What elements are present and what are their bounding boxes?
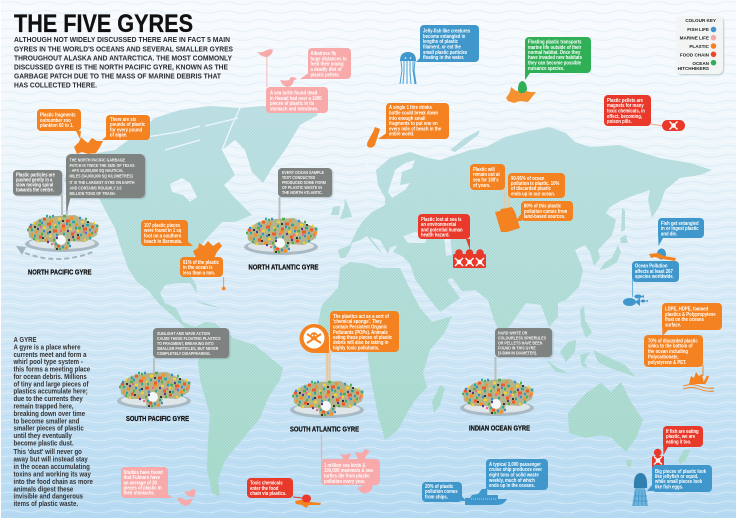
callout: fulmars: pieces of plastic in — [124, 485, 162, 492]
icon: sunken plastic — [683, 372, 714, 391]
callout: one litre bottle: into enough small — [389, 115, 425, 122]
gyre: south atlantic — [290, 350, 364, 434]
callout: sunlight and wave action: COMPLETELY DISAPPEARING. — [157, 351, 211, 356]
gyre: indian ocean: INDIAN OCEAN GYRE — [469, 426, 530, 432]
callout: albatross — [300, 48, 351, 79]
callout: one million sea birds — [321, 435, 380, 485]
gyre: south pacific — [117, 358, 191, 423]
icon: bottle — [367, 127, 380, 148]
intro text: HAS COLLECTED THERE. — [14, 80, 97, 90]
callout: human health hazard — [418, 214, 470, 250]
icon: bird below box — [357, 485, 373, 493]
text block: a gyre: of tiny and large pieces of — [14, 381, 89, 388]
gyre: south atlantic: SOUTH ATLANTIC GYRE — [290, 426, 359, 434]
colour key — [676, 16, 723, 74]
callout: human health hazard: health hazard. — [421, 232, 450, 239]
icon: poison pill — [662, 120, 685, 131]
callout: chemical sponge: The plastics act as a sort of — [333, 313, 389, 320]
callout: bermuda: foot on a southern — [144, 233, 181, 240]
callout: float on surface: float on the oceans — [665, 317, 704, 323]
callout: plastic particles: pushed gently in a — [16, 177, 53, 183]
callout: 80 percent: pollution comes from — [524, 208, 567, 215]
callout: north pacific garbage patch: THE NORTH PACIFIC GARBAGE — [70, 157, 125, 163]
callout: ships — [422, 482, 466, 502]
callout: less than a mm — [180, 257, 226, 290]
callout: every ocean sample — [278, 168, 332, 197]
callout: toxic chemicals — [247, 478, 302, 498]
text block: a gyre: for ocean debris. Millions — [14, 374, 87, 381]
intro text: ALTHOUGH NOT WIDELY DISCUSSED THERE ARE IN FACT 5 MAIN — [14, 35, 230, 44]
gyre: indian ocean — [460, 357, 534, 432]
callout: sunlight and wave action: TO FRAGMENT, BREAKING INTO — [157, 341, 214, 346]
text block: a gyre: currents meet and form a — [14, 351, 87, 359]
colour key: COLOUR KEY — [685, 18, 716, 23]
gyre: north atlantic — [244, 197, 319, 272]
callout: big pieces look like jellyfish: while small pieces look — [654, 479, 702, 485]
callout: chemical sponge: debris will also be taking in — [333, 340, 388, 346]
icon: three people with skulls — [453, 249, 486, 268]
text block: a gyre: this forms a meeting place — [14, 366, 90, 374]
callout: every ocean sample: THE NORTH ATLANTIC. — [282, 190, 323, 195]
callout: cruise ship: weekly, much of which — [488, 477, 535, 484]
text block: a gyre: A GYRE — [14, 336, 37, 344]
callout: jelly-fish: become entangled in — [423, 33, 465, 40]
callout: human health hazard: Plastic lost at sea is — [421, 216, 462, 223]
callout: cruise ship: ends up in the oceans. — [489, 483, 535, 489]
callout: less than a mm: less than a mm. — [183, 270, 215, 277]
callout: eating it too: plastic, we are — [666, 434, 695, 440]
title: THE FIVE GYRES — [14, 11, 193, 38]
intro text: THROUGHOUT ALASKA AND ANTARCTICA. THE MOST COMMONLY — [14, 53, 232, 62]
text block: a gyre: invisible and dangerous — [14, 493, 83, 501]
callout: sea turtle: in Hawaii had over a 1000 — [270, 95, 322, 102]
callout: cruise ship: eight tons of solid waste — [489, 472, 539, 479]
icon: pink bird top — [257, 49, 273, 87]
text block: a gyre: plastics accumulate here; — [14, 388, 88, 396]
callout: chemical sponge: contain Persistent Organic — [333, 324, 388, 331]
intro text: GYRES IN THE WORLD'S OCEANS AND SEVERAL SMALLER GYRES — [14, 44, 233, 53]
callout: sea turtle — [266, 87, 328, 113]
callout: north pacific garbage patch: PATCH IS TWICE THE SIZE OF TEXAS — [70, 162, 135, 168]
callout: north pacific garbage patch: MILLION TONS OF TRASH. — [70, 190, 116, 196]
callout: albatross: huge distances to — [310, 56, 347, 62]
callout: hundreds of years: sea for 100's — [473, 177, 499, 184]
callout: one litre bottle: fragments to put one on — [389, 121, 438, 127]
callout: 90-95 percent: 90-95% of ocean — [511, 175, 544, 182]
callout: north pacific garbage patch: AND CONTAINS ROUGHLY 3.5 — [70, 185, 122, 191]
callout: poison pills: Plastic pellets are — [607, 97, 643, 104]
callout: hundreds of years — [470, 164, 505, 209]
callout: hard white spherules — [495, 328, 552, 357]
callout: one litre bottle: A single 1 litre drinks — [389, 105, 432, 111]
callout: sunlight and wave action: SUNLIGHT AND WAVE ACTION — [157, 331, 210, 336]
callout: one million sea birds: 1 million sea birds & — [324, 462, 366, 469]
callout: north pacific garbage patch: MILES (34,000,000 SQ KILOMETRES) — [70, 173, 133, 179]
callout: plastic particles: Plastic particles are — [16, 172, 55, 178]
callout: sinks to the bottom: the ocean including — [648, 348, 688, 355]
callout: plastic fragments: Plastic fragments — [40, 112, 76, 119]
callout: jelly-fish: small plastic particles — [423, 49, 468, 56]
icon: jellyfish — [400, 52, 416, 84]
callout: every ocean sample: TEST CONDUCTED — [282, 175, 315, 180]
text block: a gyre: away but will instead stay — [14, 456, 88, 463]
callout: 80 percent: land-based sources. — [524, 214, 565, 220]
callout: fulmars — [121, 467, 173, 498]
text block: a gyre: items of plastic waste. — [14, 501, 78, 508]
callout: fulmars: Studies have found — [124, 470, 163, 476]
callout: big pieces look like jellyfish: Big pieces of plastic look — [655, 468, 706, 475]
callout: human health hazard: and potential human — [421, 227, 463, 234]
callout: chemical sponge: Pollutants (POPs). Animals — [333, 329, 388, 336]
callout: six pounds: pounds of plastic — [110, 122, 146, 128]
text block: a gyre: become plastic dust. — [14, 440, 74, 448]
callout: bermuda: were found in 1 sq — [143, 228, 181, 234]
callout: sunlight and wave action — [153, 328, 229, 358]
callout: sinks to the bottom — [644, 335, 703, 376]
text block: a gyre: into the food chain as more — [14, 479, 93, 486]
callout: toxic chemicals: Toxic chemicals — [250, 480, 283, 487]
text block: a gyre: in the ocean accumulating — [14, 464, 90, 471]
callout: 90-95 percent: ends up in our ocean. — [511, 191, 555, 198]
callout: 267 species: affects at least 267 — [635, 268, 673, 275]
callout: every ocean sample: EVERY OCEAN SAMPLE — [282, 170, 324, 175]
callout: float on surface: plastics & Polypropylene — [665, 311, 716, 318]
callout: jelly-fish: lengths of plastic — [423, 39, 458, 45]
callout: chemical sponge — [330, 311, 399, 352]
callout: hitchhikers: nuisance species. — [528, 65, 564, 72]
callout: hitchhikers: they can become possible — [528, 60, 581, 67]
callout: hitchhikers: marine life outside of their — [528, 44, 581, 51]
callout: eating it too: eating it too. — [666, 439, 691, 446]
icon: birds above box — [340, 449, 370, 460]
callout: hitchhikers — [525, 37, 591, 80]
callout: plastic particles: slow moving spiral — [16, 182, 53, 188]
callout: fish entangled: in or ingest plastic — [661, 226, 699, 232]
icon: two fulmars — [177, 489, 196, 506]
callout: chemical sponge: eating these pieces of plastic — [333, 334, 393, 341]
callout: one litre bottle: entire world. — [389, 131, 414, 138]
text block: a gyre: A gyre is a place where — [14, 344, 81, 352]
callout: bermuda — [141, 220, 193, 246]
icon: fish in plastic — [649, 248, 676, 261]
callout: plastic particles — [13, 170, 62, 196]
callout: six pounds: of algae. — [110, 132, 127, 139]
callout: hard white spherules: HARD WHITE OR — [498, 330, 527, 335]
icon: orange skull badge — [300, 324, 329, 353]
callout: fish entangled: Fish get entangled — [661, 220, 699, 227]
callout: hundreds of years: of years. — [473, 182, 491, 189]
callout: one litre bottle: every mile of beach in the — [389, 126, 441, 133]
text block: a gyre: animals digest these — [14, 486, 74, 493]
callout: sea turtle: stomach and intestines. — [270, 106, 319, 113]
callout: poison pills: poison pills. — [607, 119, 632, 125]
icon: fish on plastic — [295, 494, 321, 508]
callout: toxic chemicals: enter the food — [250, 485, 278, 492]
callout: ships: pollution comes — [425, 489, 458, 495]
gyre: north atlantic: NORTH ATLANTIC GYRE — [248, 264, 319, 272]
colour key: PLASTIC — [689, 44, 710, 49]
callout: sea turtle: pieces of plastic in its — [270, 101, 315, 107]
callout: plastic particles: towards the centre. — [16, 187, 54, 193]
text block: a gyre: toxins and working its way — [14, 471, 91, 478]
callout: poison pills: magnets for many — [607, 103, 644, 109]
callout: big pieces look like jellyfish: like fish eggs. — [655, 484, 683, 491]
callout: 90-95 percent: pollution is plastic. 10% — [511, 180, 560, 187]
callout: albatross: plastic pellets. — [310, 72, 340, 78]
text block: a gyre: breaking down over time — [14, 411, 85, 418]
callout: hard white spherules: FOUND IN THIS GYRE — [498, 345, 536, 350]
icon: fish school — [623, 294, 648, 306]
callout: hitchhikers: have invaded new habitats — [528, 55, 582, 61]
callout: big pieces look like jellyfish: like jellyfish or squid, — [655, 473, 698, 480]
icon: plastic debris north pacific — [74, 137, 103, 154]
callout: one million sea birds: turtles die from plastic — [324, 473, 370, 480]
callout: albatross: a deadly diet of — [310, 67, 342, 73]
callout: eating it too: If fish are eating — [666, 428, 699, 435]
callout: one litre bottle: bottle could break down — [389, 110, 438, 117]
callout: one litre bottle — [378, 103, 449, 139]
callout: sunlight and wave action: SMALLER PARTICLES, BUT NEVER — [157, 346, 218, 351]
callout: jelly-fish: filament, or eat the — [423, 44, 461, 51]
colour key: MARINE LIFE — [680, 36, 709, 40]
callout: fulmars: their stomachs. — [124, 490, 155, 497]
callout: every ocean sample: OF PLASTIC WASTE IN — [282, 185, 322, 190]
text block: a gyre: whirl pool type system - — [13, 359, 83, 366]
callout: cruise ship: A typical 3,000 passenger — [489, 461, 541, 468]
callout: plastic fragments — [37, 109, 81, 139]
callout: six pounds: for every pound — [110, 127, 142, 134]
icon: plastic jellyfish — [632, 473, 648, 506]
callout: six pounds: There are six — [110, 116, 137, 123]
callout: north pacific garbage patch: IT IS THE LARGEST GYRE ON EARTH — [70, 180, 135, 185]
callout: jelly-fish: Jelly-fish like creatures — [423, 28, 470, 35]
icon: plastic raft with hitchhiker — [506, 81, 536, 103]
gyre: north pacific — [16, 195, 99, 276]
callout: every ocean sample: PRODUCED SOME FORM — [282, 180, 326, 185]
callout: float on surface: surface. — [665, 322, 681, 329]
text block: a gyre: until they eventually — [14, 433, 72, 440]
callout: hitchhikers: normal habitat. Once they — [528, 50, 581, 56]
callout: 80 percent: 80% of this plastic — [524, 203, 561, 210]
callout: 267 species: Ocean Pollution — [635, 263, 668, 270]
colour key: OCEAN — [692, 61, 710, 66]
callout: 80 percent — [516, 201, 573, 221]
callout: plastic fragments: outnumber zoo — [40, 117, 71, 124]
callout: ships: from ships. — [425, 494, 448, 501]
callout: plastic fragments: plankton 60 to 1. — [40, 123, 74, 129]
colour key: HITCHHIKERS — [678, 66, 709, 71]
callout: hard white spherules: COLOURLESS SPHERULES — [498, 335, 546, 340]
callout: sinks to the bottom: 70% of discarded plastic — [648, 338, 698, 345]
callout: sinks to the bottom: polystyrene & PET. — [648, 359, 686, 366]
icon: plastic bag — [495, 207, 520, 232]
icon: plastic debris atlantic — [193, 241, 222, 258]
callout: chemical sponge: highly toxic pollutants. — [333, 345, 379, 352]
callout: albatross: Albatross fly — [310, 51, 337, 57]
callout: hard white spherules: OR PELLETS HAVE BEEN — [498, 340, 542, 345]
callout: hitchhikers: Floating plastic transports — [528, 39, 582, 46]
callout: hundreds of years: remain out at — [473, 172, 500, 178]
callout: jelly-fish: floating in the water. — [423, 55, 464, 61]
callout: one million sea birds: 100,000 mammals & sea — [324, 468, 373, 474]
callout: fish entangled: and die. — [661, 231, 677, 238]
callout: fish entangled — [658, 218, 704, 246]
callout: human health hazard: an environmental — [421, 222, 456, 228]
callout: 267 species: species worldwide. — [635, 274, 674, 280]
callout: albatross: feed their young — [310, 61, 344, 68]
callout: one million sea birds: pollution every year. — [324, 478, 365, 485]
callout: sinks to the bottom: sinks to the bottom of — [648, 343, 693, 350]
callout: 90-95 percent: of discarded plastic — [511, 186, 551, 192]
callout: ships: 20% of plastic — [425, 483, 454, 490]
intro text: GARBAGE PATCH DUE TO THE MASS OF MARINE DEBRIS THAT — [14, 72, 221, 81]
callout: fulmars: that Fulmars have — [124, 475, 160, 481]
callout: poison pills — [604, 95, 663, 126]
callout: bermuda: beach in Bermuda. — [144, 238, 182, 245]
text block: a gyre: remain trapped here, — [14, 403, 74, 410]
callout: poison pills: effect, becoming, — [607, 113, 642, 120]
callout: float on surface: LDPE, HDPE, foamed — [665, 306, 708, 313]
callout: north pacific garbage patch: - APX 10,000,000 SQ NAUTICAL — [70, 168, 124, 173]
callout: sinks to the bottom: Polycarbonate, — [648, 354, 679, 361]
callout: six pounds — [102, 115, 150, 140]
callout: fulmars: an average of 30 — [124, 480, 157, 487]
world map — [64, 106, 712, 497]
text block: a gyre: smaller pieces of plastic — [14, 425, 84, 433]
callout: chemical sponge: 'chemical sponge'. They — [333, 319, 382, 325]
icon: cruise ship — [465, 489, 507, 505]
callout: big pieces look like jellyfish — [647, 465, 712, 492]
callout: jelly-fish — [416, 25, 479, 62]
text block: a gyre: due to the currents they — [14, 396, 83, 403]
callout: hard white spherules: (3-5MM IN DIAMETER). — [498, 350, 537, 355]
callout: hundreds of years: Plastic will — [473, 166, 495, 173]
text block: a gyre: to become smaller and — [14, 418, 79, 425]
gyre: north pacific: NORTH PACIFIC GYRE — [28, 270, 92, 276]
callout: 90-95 percent — [508, 173, 565, 209]
callout: eating it too — [663, 426, 703, 455]
callout: bermuda: 107 plastic pieces — [144, 222, 181, 229]
callout: 267 species — [632, 261, 679, 297]
callout: poison pills: toxic chemicals, in — [607, 108, 645, 115]
callout: cruise ship — [486, 459, 548, 496]
callout: less than a mm: 61% of the plastic — [183, 259, 219, 266]
text block: a gyre: This 'dust' will never go — [14, 449, 82, 456]
callout: sunlight and wave action: CAUSE THESE FLOATING PLASTICS — [157, 336, 221, 341]
callout: toxic chemicals: chain via plastics. — [250, 491, 286, 497]
callout: cruise ship: cruise ship produces over — [489, 467, 542, 473]
callout: north pacific garbage patch — [66, 154, 145, 213]
icon: pink bird lower — [280, 77, 297, 87]
callout: sea turtle: A sea turtle found dead — [270, 90, 317, 97]
colour key: FOOD CHAIN — [680, 52, 710, 57]
callout: less than a mm: in the ocean is — [183, 265, 213, 271]
colour key: FISH LIFE — [687, 27, 709, 32]
intro text — [14, 35, 233, 90]
intro text: DISCUSSED GYRE IS THE NORTH PACIFIC GYRE, KNOWN AS THE — [14, 62, 228, 72]
icon: red person with skull — [652, 449, 664, 469]
callout: float on surface — [662, 303, 722, 336]
gyre: south pacific: SOUTH PACIFIC GYRE — [126, 416, 189, 423]
